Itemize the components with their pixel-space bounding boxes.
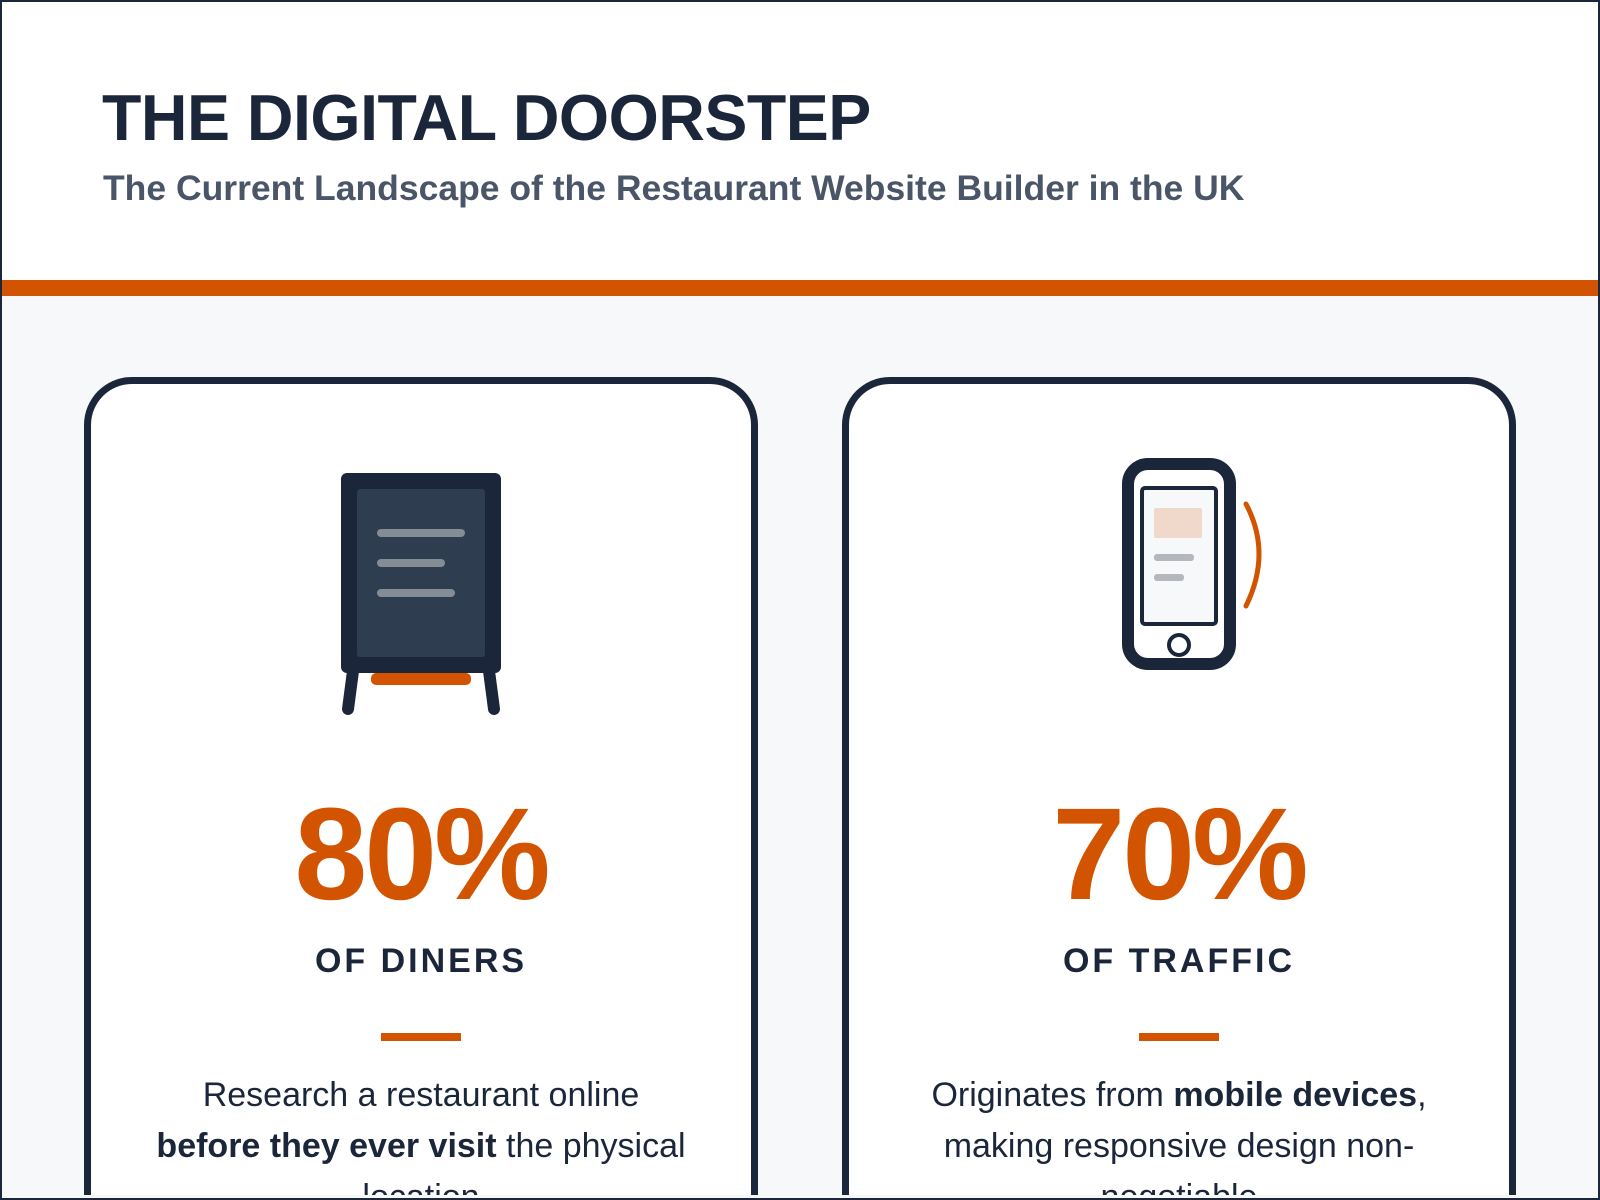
stat: 70%: 70% <box>1052 780 1306 927</box>
text: research: Research a restaurant online <box>203 1076 639 1114</box>
icon: mobile phone <box>1122 458 1262 670</box>
label: of diners: OF DINERS <box>315 942 527 980</box>
text: mobile: Originates from mobile devices, <box>931 1076 1427 1114</box>
icon: menu board <box>341 473 501 715</box>
subtitle: The Current Landscape of the Restaurant Website Builder in the UK <box>103 168 1244 208</box>
stat: 80%: 80% <box>294 780 548 927</box>
text: research <box>156 1076 686 1195</box>
title: THE DIGITAL DOORSTEP <box>102 82 871 154</box>
panel: traffic <box>842 377 1516 1195</box>
text: research: before they ever visit the physical <box>156 1127 686 1165</box>
panel: diners <box>84 377 758 1195</box>
label: of traffic: OF TRAFFIC <box>1063 942 1295 980</box>
text: mobile: making responsive design non- <box>944 1127 1414 1165</box>
header <box>0 0 1600 280</box>
text: mobile <box>931 1076 1427 1195</box>
